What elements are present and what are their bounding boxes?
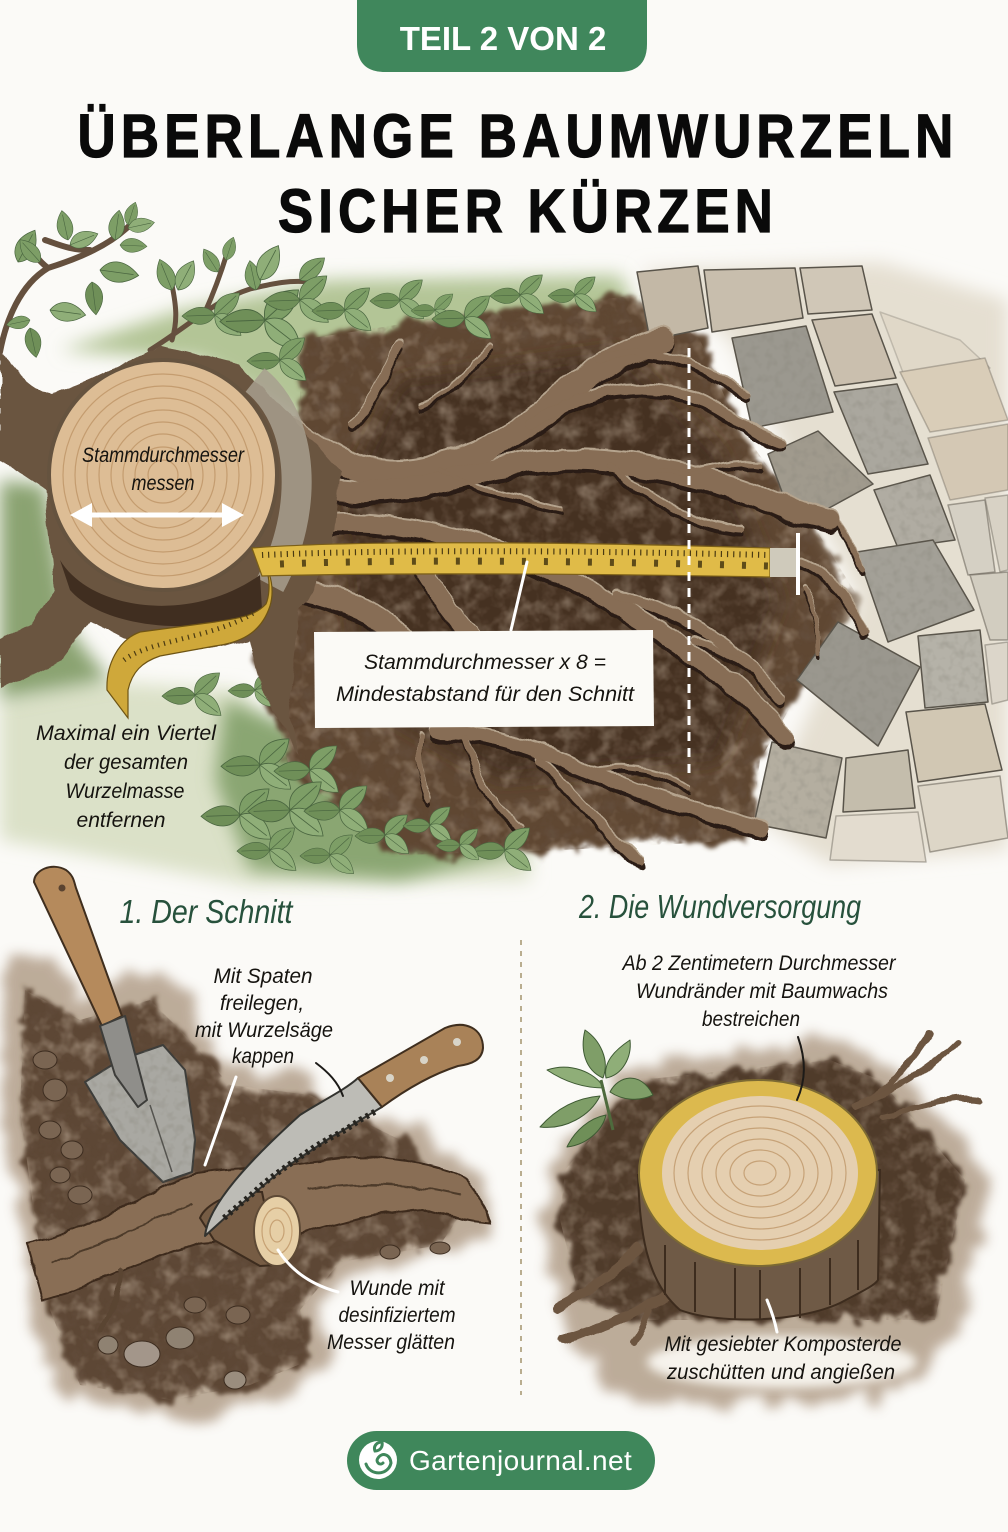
label: smooth wound [327, 1277, 456, 1354]
banner: part label: TEIL 2 VON 2 [400, 20, 606, 57]
label: compost: zuschütten und angießen [666, 1361, 895, 1384]
label: smooth wound: Wunde mit [350, 1277, 446, 1300]
label: trunk diameter [82, 444, 245, 495]
leader: tape to formula [511, 562, 527, 630]
side roots [557, 1033, 980, 1343]
leader: spade [205, 1077, 236, 1165]
stump [638, 1080, 880, 1320]
dashed line: minimum distance [688, 348, 690, 778]
soil patch [530, 1040, 1000, 1405]
icon: pruning saw [205, 1025, 483, 1236]
leader: compost [767, 1300, 777, 1332]
soil clods [33, 1051, 450, 1389]
label: expose and cut: freilegen, [220, 992, 304, 1015]
label: compost [664, 1333, 902, 1384]
soil patch [0, 940, 500, 1430]
callout: formula: Mindestabstand für den Schnitt [336, 683, 635, 706]
cut surface with rings [49, 360, 277, 590]
title: SICHER KÜRZEN [278, 177, 778, 245]
callout: formula: Stammdurchmesser x 8 = [364, 651, 606, 674]
label: smooth wound: desinfiziertem [338, 1304, 456, 1327]
label: smooth wound: Messer glätten [327, 1331, 455, 1354]
label: expose and cut: mit Wurzelsäge [195, 1019, 333, 1042]
callout: formula [314, 630, 654, 728]
label: wax: Ab 2 Zentimetern Durchmesser [621, 952, 896, 975]
cut root segment [200, 1192, 300, 1266]
label: root mass limit: Maximal ein Viertel [36, 722, 217, 745]
banner: part label [357, 0, 647, 72]
label: root mass limit [36, 722, 217, 832]
label: wax [621, 952, 896, 1031]
leader: wax [797, 1037, 804, 1100]
label: root mass limit: entfernen [76, 809, 166, 832]
foliage: branches and leaves [0, 200, 601, 880]
label: trunk diameter: Stammdurchmesser [82, 444, 245, 467]
paving stones [637, 266, 1008, 862]
heading: step 1: 1. Der Schnitt [120, 893, 294, 930]
wax ring and cut surface [639, 1080, 877, 1266]
panel: step 2 wound care [530, 952, 1000, 1405]
label: root mass limit: Wurzelmasse [66, 780, 184, 803]
label: compost: Mit gesiebter Komposterde [664, 1333, 902, 1356]
measuring tape [107, 533, 798, 718]
divider [520, 940, 522, 1395]
label: trunk diameter: messen [132, 472, 194, 495]
leader: wound [278, 1250, 338, 1292]
label: expose and cut: kappen [232, 1045, 294, 1068]
tree trunk and stump [0, 345, 340, 755]
heading: step 2: 2. Die Wundversorgung [578, 888, 862, 925]
label: wax: bestreichen [702, 1008, 800, 1031]
label: root mass limit: der gesamten [64, 751, 188, 774]
icon: spade [34, 867, 197, 1185]
footer badge: brand [347, 1431, 655, 1490]
panel: root diagram scene [0, 200, 1008, 885]
soil bed [230, 285, 910, 865]
root being cut [27, 1158, 490, 1330]
arrow: trunk diameter [70, 503, 244, 527]
footer badge: brand: Gartenjournal.net [409, 1445, 632, 1476]
foliage wash [0, 275, 640, 885]
leader: saw [316, 1063, 343, 1096]
pavers wash [640, 262, 1008, 865]
panel: step 1 the cut [0, 867, 500, 1430]
icon: brand logo [359, 1441, 397, 1479]
roots [295, 338, 865, 866]
icon: seedling [540, 1030, 653, 1147]
label: expose and cut [195, 965, 333, 1068]
label: expose and cut: Mit Spaten [214, 965, 312, 988]
label: wax: Wundränder mit Baumwachs [636, 980, 888, 1003]
title [78, 102, 958, 245]
